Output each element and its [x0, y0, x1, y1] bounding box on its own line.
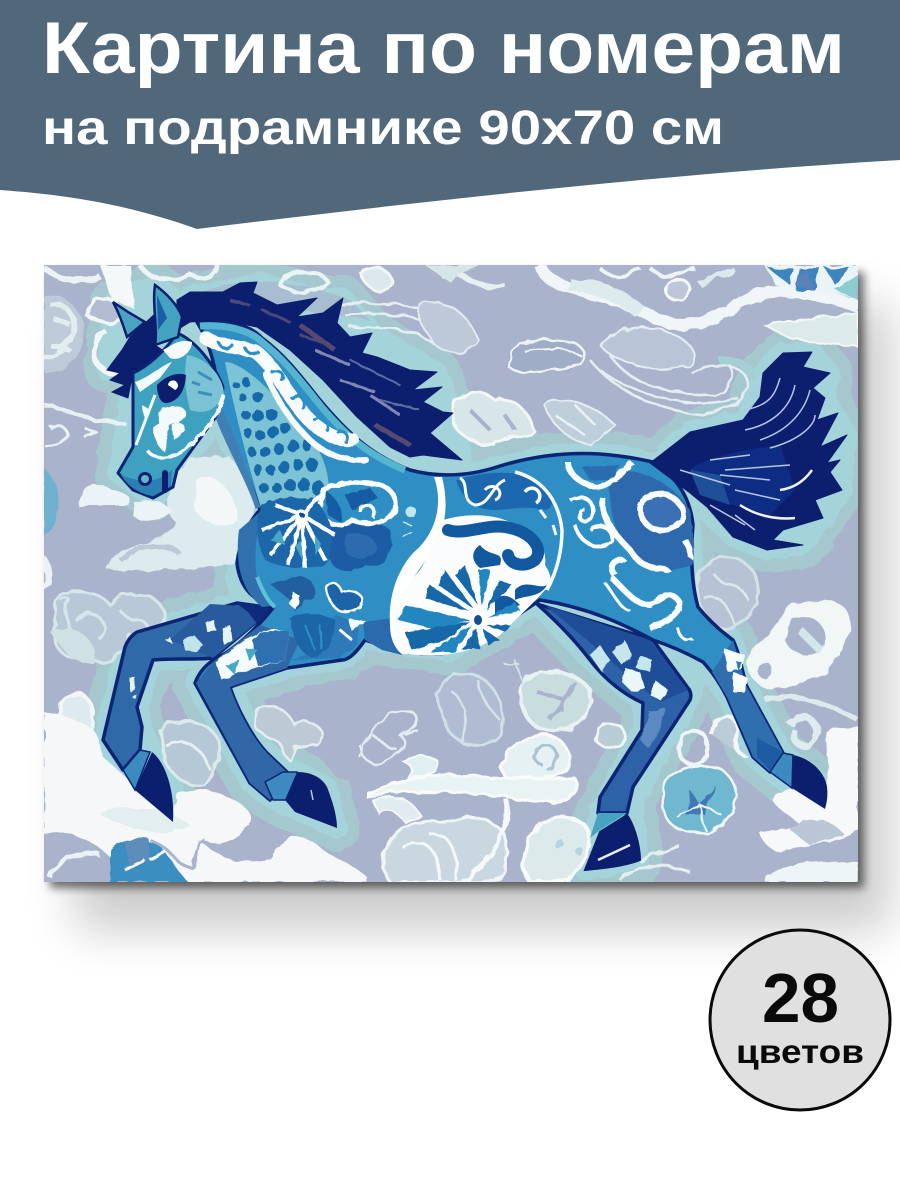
mane highlights [230, 300, 420, 445]
caption: цветов [736, 1033, 864, 1070]
rose outline behind tail [697, 557, 758, 630]
top left scrolls [44, 268, 100, 281]
head shape [118, 333, 223, 498]
hoof [590, 813, 627, 838]
body with neck and near legs [195, 321, 783, 800]
banner shape [0, 0, 900, 229]
near ear [154, 285, 182, 345]
badge: 28 colours [710, 930, 890, 1110]
top centre curls [280, 272, 328, 292]
canvas background [44, 265, 858, 882]
far front leg [103, 603, 275, 822]
right white clouds [747, 600, 850, 690]
pale cloud below muzzle [107, 456, 257, 571]
white s-curve divider [390, 477, 446, 654]
subtitle: на подрамнике 90х70 см [42, 102, 724, 155]
neck leopard pattern [225, 362, 329, 512]
shoulder flowers [270, 577, 362, 658]
white head scrolls [142, 395, 224, 458]
background clouds and scrolls [44, 265, 858, 882]
white lower panel [395, 515, 551, 656]
neck front shading [218, 408, 258, 508]
eye [157, 374, 186, 403]
top right white ribbon and floral corner [540, 265, 858, 325]
neck crest teal rim [200, 326, 405, 470]
white brow and marks [163, 341, 192, 359]
cloud flowers left of legs [54, 591, 165, 662]
far front leg flowers [130, 620, 232, 700]
rump ornaments [568, 462, 694, 640]
lotus flower petals [398, 565, 520, 652]
neck white scrolls [206, 338, 366, 460]
teal halo around horse [103, 282, 847, 870]
painting canvas [44, 265, 858, 882]
head [107, 285, 224, 498]
flowers along the bottom [373, 797, 690, 882]
centre panel [390, 472, 562, 656]
dark blob [325, 521, 392, 571]
white wave with snail swirl [367, 775, 577, 802]
tail [650, 352, 847, 550]
title: Картина по номерам [42, 8, 845, 89]
upper panel blotches [456, 473, 552, 510]
near hooves [265, 753, 827, 828]
header banner [0, 0, 900, 229]
upper scroll [320, 483, 396, 525]
horse [103, 282, 847, 870]
near leg flower details [215, 615, 748, 692]
dense pale flower [521, 671, 591, 731]
tail highlights [680, 378, 815, 530]
forelock [107, 312, 165, 398]
dark scroll band [448, 526, 538, 565]
radiating flower [257, 498, 332, 568]
chest peony [257, 483, 416, 571]
muzzle [121, 470, 172, 496]
far hind leg flowers [590, 640, 668, 748]
large white cloud lower left [44, 713, 367, 882]
face pale patch [185, 355, 224, 412]
near leg shading [196, 510, 783, 800]
wall shadow of the canvas [50, 272, 890, 930]
far hind leg [537, 604, 691, 870]
cloud outlines under belly [253, 706, 418, 764]
number: 28 [762, 959, 839, 1037]
hoof [123, 750, 150, 790]
mane [177, 282, 462, 460]
outlined flower under belly [437, 673, 503, 745]
far ear [113, 302, 145, 337]
swirl outlines upper middle [509, 340, 584, 372]
teal peony lower right [664, 766, 735, 833]
